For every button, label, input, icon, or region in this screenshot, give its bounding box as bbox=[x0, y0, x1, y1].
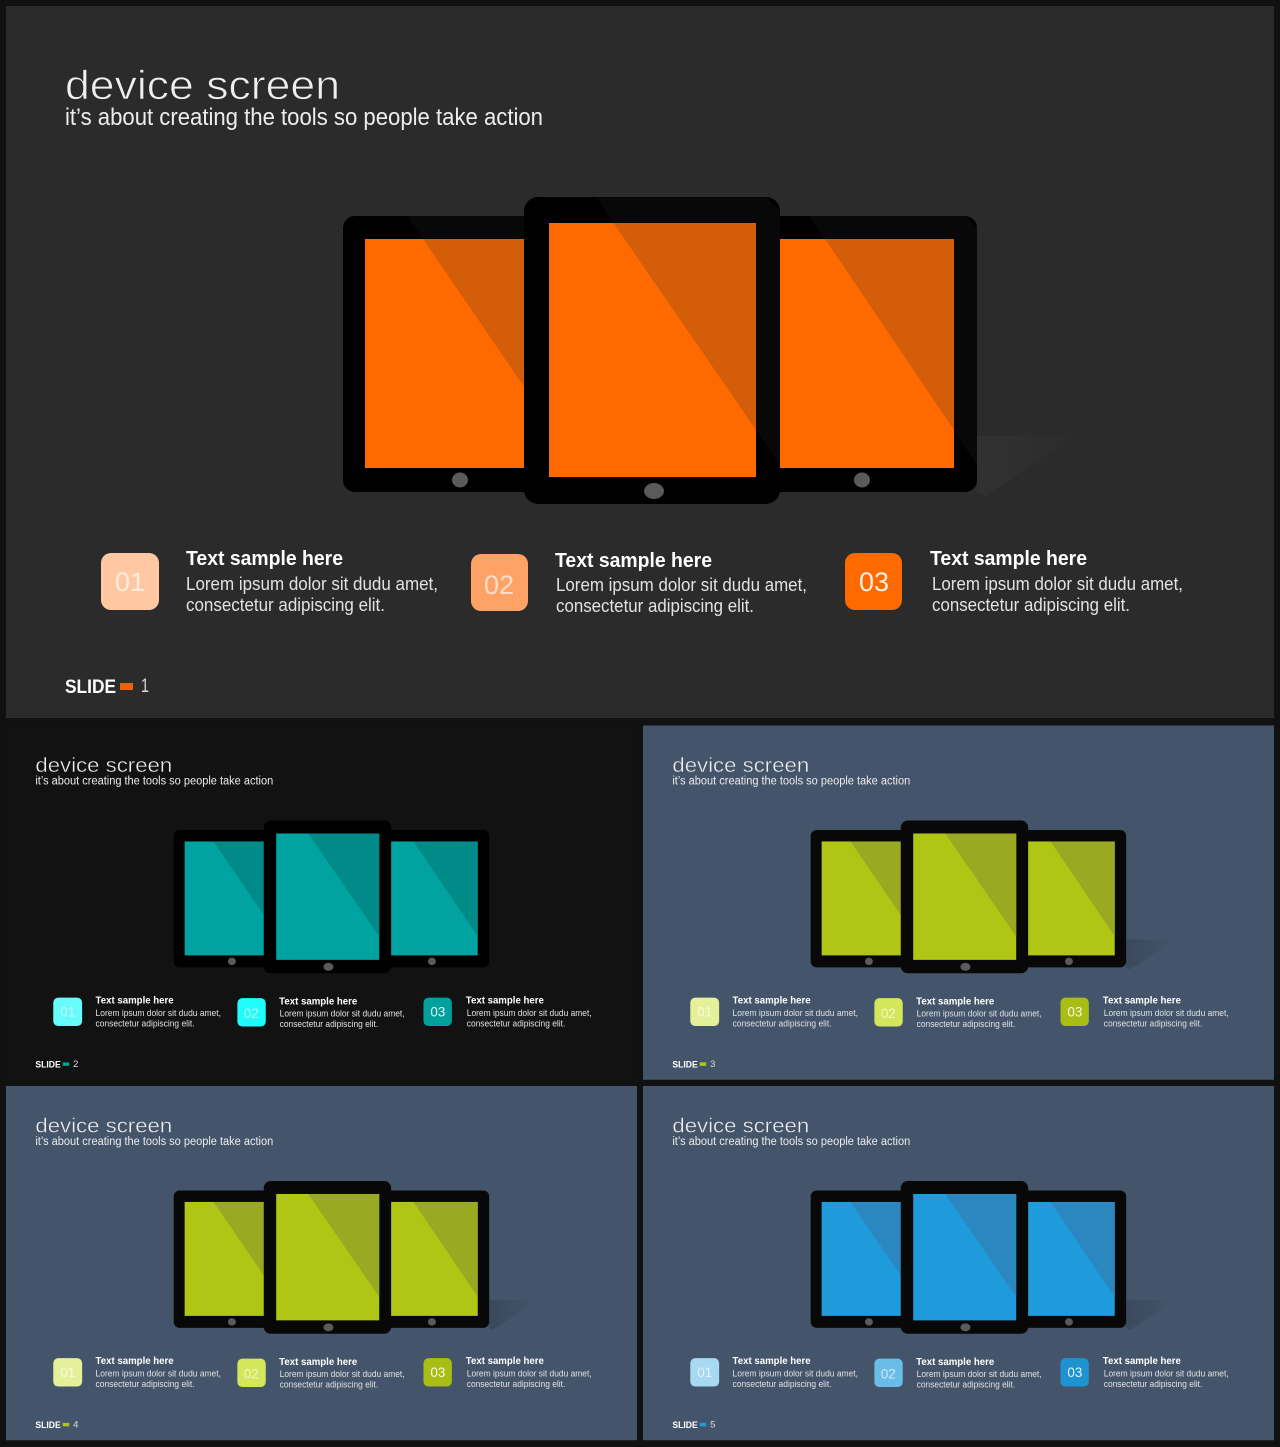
item 2: consectetur adipiscing elit. bbox=[917, 1019, 1015, 1029]
item 2: consectetur adipiscing elit. bbox=[280, 1019, 378, 1029]
item 1: consectetur adipiscing elit. bbox=[96, 1379, 195, 1389]
item 2 bbox=[237, 997, 405, 1029]
item 2: Lorem ipsum dolor sit dudu amet, bbox=[280, 1369, 405, 1379]
item 3: Text sample here bbox=[466, 996, 544, 1007]
item 3: Lorem ipsum dolor sit dudu amet, bbox=[1104, 1008, 1229, 1018]
item 2: Text sample here bbox=[279, 997, 358, 1008]
slide number: 5 bbox=[710, 1419, 715, 1430]
item 2: 02 bbox=[484, 570, 514, 600]
item 1 bbox=[690, 996, 858, 1029]
item 2: Lorem ipsum dolor sit dudu amet, bbox=[556, 575, 807, 595]
icon: right tablet bbox=[375, 830, 489, 967]
subtitle: it’s about creating the tools so people take action bbox=[672, 1134, 910, 1148]
item 1: Lorem ipsum dolor sit dudu amet, bbox=[733, 1369, 858, 1379]
icon: center tablet bbox=[901, 821, 1028, 973]
title: device screen bbox=[35, 755, 172, 777]
icon: left tablet bbox=[174, 830, 290, 967]
slide number: 2 bbox=[73, 1059, 78, 1070]
item 3: Lorem ipsum dolor sit dudu amet, bbox=[932, 574, 1183, 594]
panel: slide 3 bbox=[643, 726, 1274, 1080]
item 2: Lorem ipsum dolor sit dudu amet, bbox=[280, 1009, 405, 1019]
item 3: Text sample here bbox=[930, 548, 1087, 570]
icon: center tablet bbox=[264, 1181, 391, 1334]
item 1: consectetur adipiscing elit. bbox=[96, 1019, 195, 1029]
item 2 bbox=[471, 550, 807, 616]
slide number bbox=[65, 676, 149, 698]
slide number: SLIDE bbox=[672, 1059, 698, 1070]
panel: slide 2 bbox=[6, 726, 637, 1080]
item 3: consectetur adipiscing elit. bbox=[1104, 1019, 1202, 1029]
item 3: 03 bbox=[430, 1365, 445, 1380]
device shadow bbox=[489, 1300, 538, 1330]
slide number bbox=[35, 1059, 78, 1070]
item 1: Text sample here bbox=[96, 1356, 174, 1367]
slide number: SLIDE bbox=[672, 1420, 698, 1431]
icon: right tablet bbox=[747, 216, 977, 492]
item 1: Lorem ipsum dolor sit dudu amet, bbox=[96, 1369, 221, 1379]
item 3: 03 bbox=[1067, 1365, 1082, 1380]
item 1: Lorem ipsum dolor sit dudu amet, bbox=[96, 1008, 221, 1018]
item 1: consectetur adipiscing elit. bbox=[733, 1019, 832, 1029]
slide number: 4 bbox=[73, 1419, 78, 1430]
item 3: Text sample here bbox=[466, 1356, 544, 1367]
item 2: Text sample here bbox=[555, 550, 712, 572]
item 3: Lorem ipsum dolor sit dudu amet, bbox=[467, 1369, 592, 1379]
slide number bbox=[672, 1419, 715, 1431]
item 3 bbox=[1060, 1356, 1229, 1389]
item 1 bbox=[101, 548, 438, 615]
item 1: Lorem ipsum dolor sit dudu amet, bbox=[733, 1008, 858, 1018]
item 2: Lorem ipsum dolor sit dudu amet, bbox=[917, 1009, 1042, 1019]
item 2: Text sample here bbox=[916, 1357, 995, 1368]
panel: slide 5 bbox=[643, 1086, 1274, 1440]
item 3 bbox=[1060, 996, 1229, 1029]
icon: right tablet bbox=[1012, 1190, 1126, 1328]
item 3: consectetur adipiscing elit. bbox=[467, 1019, 565, 1029]
item 1: consectetur adipiscing elit. bbox=[186, 595, 385, 615]
title: device screen bbox=[65, 62, 340, 108]
item 3: 03 bbox=[859, 567, 889, 597]
slide number: SLIDE bbox=[65, 677, 116, 698]
item 2 bbox=[237, 1357, 405, 1390]
panel: slide 4 bbox=[6, 1086, 637, 1440]
item 3: consectetur adipiscing elit. bbox=[1104, 1379, 1202, 1389]
item 2: consectetur adipiscing elit. bbox=[917, 1380, 1015, 1390]
icon: left tablet bbox=[811, 1190, 927, 1328]
item 2: 02 bbox=[881, 1006, 896, 1021]
icon: left tablet bbox=[174, 1190, 290, 1328]
slide number: SLIDE bbox=[35, 1420, 61, 1431]
item 3 bbox=[845, 548, 1183, 615]
subtitle: it’s about creating the tools so people take action bbox=[35, 774, 273, 788]
item 1: Text sample here bbox=[733, 996, 811, 1007]
item 3: Lorem ipsum dolor sit dudu amet, bbox=[467, 1008, 592, 1018]
device shadow bbox=[1126, 1300, 1175, 1330]
item 1: 01 bbox=[60, 1365, 75, 1380]
title: device screen bbox=[672, 755, 809, 777]
subtitle: it’s about creating the tools so people take action bbox=[672, 774, 910, 788]
item 1: 01 bbox=[60, 1005, 75, 1020]
item 3: consectetur adipiscing elit. bbox=[467, 1379, 565, 1389]
icon: left tablet bbox=[343, 216, 577, 492]
item 3 bbox=[423, 996, 592, 1029]
icon: center tablet bbox=[524, 197, 780, 504]
device shadow bbox=[977, 436, 1075, 496]
title: device screen bbox=[672, 1115, 809, 1137]
item 3: Lorem ipsum dolor sit dudu amet, bbox=[1104, 1369, 1229, 1379]
item 2 bbox=[874, 997, 1042, 1029]
slide number bbox=[35, 1419, 78, 1431]
slide number: 1 bbox=[141, 676, 149, 697]
item 3: Text sample here bbox=[1103, 996, 1181, 1007]
item 2: consectetur adipiscing elit. bbox=[280, 1380, 378, 1390]
item 3: 03 bbox=[430, 1005, 445, 1020]
item 2: 02 bbox=[881, 1367, 896, 1382]
item 1: 01 bbox=[115, 567, 145, 597]
item 1 bbox=[53, 1356, 221, 1389]
subtitle: it’s about creating the tools so people take action bbox=[35, 1134, 273, 1148]
item 1: 01 bbox=[697, 1365, 712, 1380]
item 1: Text sample here bbox=[186, 548, 343, 570]
item 3 bbox=[423, 1356, 592, 1389]
item 1: Text sample here bbox=[733, 1356, 811, 1367]
item 2: Lorem ipsum dolor sit dudu amet, bbox=[917, 1369, 1042, 1379]
item 2 bbox=[874, 1357, 1042, 1390]
item 3: 03 bbox=[1067, 1005, 1082, 1020]
item 1: Text sample here bbox=[96, 996, 174, 1007]
item 1 bbox=[690, 1356, 858, 1389]
slide number: SLIDE bbox=[35, 1059, 61, 1070]
panel: slide 1 bbox=[6, 6, 1274, 718]
item 1 bbox=[53, 996, 221, 1029]
icon: right tablet bbox=[375, 1190, 489, 1328]
item 2: consectetur adipiscing elit. bbox=[556, 596, 754, 616]
icon: left tablet bbox=[811, 830, 927, 967]
slide number: 3 bbox=[710, 1059, 715, 1070]
item 1: 01 bbox=[697, 1005, 712, 1020]
item 1: consectetur adipiscing elit. bbox=[733, 1379, 832, 1389]
device shadow bbox=[1126, 939, 1175, 969]
item 2: Text sample here bbox=[279, 1357, 358, 1368]
title: device screen bbox=[35, 1115, 172, 1137]
icon: right tablet bbox=[1012, 830, 1126, 967]
icon: center tablet bbox=[264, 821, 391, 973]
item 3: consectetur adipiscing elit. bbox=[932, 595, 1130, 615]
icon: center tablet bbox=[901, 1181, 1028, 1334]
item 2: 02 bbox=[244, 1367, 259, 1382]
item 2: 02 bbox=[244, 1006, 259, 1021]
subtitle: it’s about creating the tools so people take action bbox=[65, 104, 543, 131]
item 3: Text sample here bbox=[1103, 1356, 1181, 1367]
item 2: Text sample here bbox=[916, 997, 995, 1008]
item 1: Lorem ipsum dolor sit dudu amet, bbox=[186, 574, 438, 594]
slide number bbox=[672, 1059, 715, 1070]
